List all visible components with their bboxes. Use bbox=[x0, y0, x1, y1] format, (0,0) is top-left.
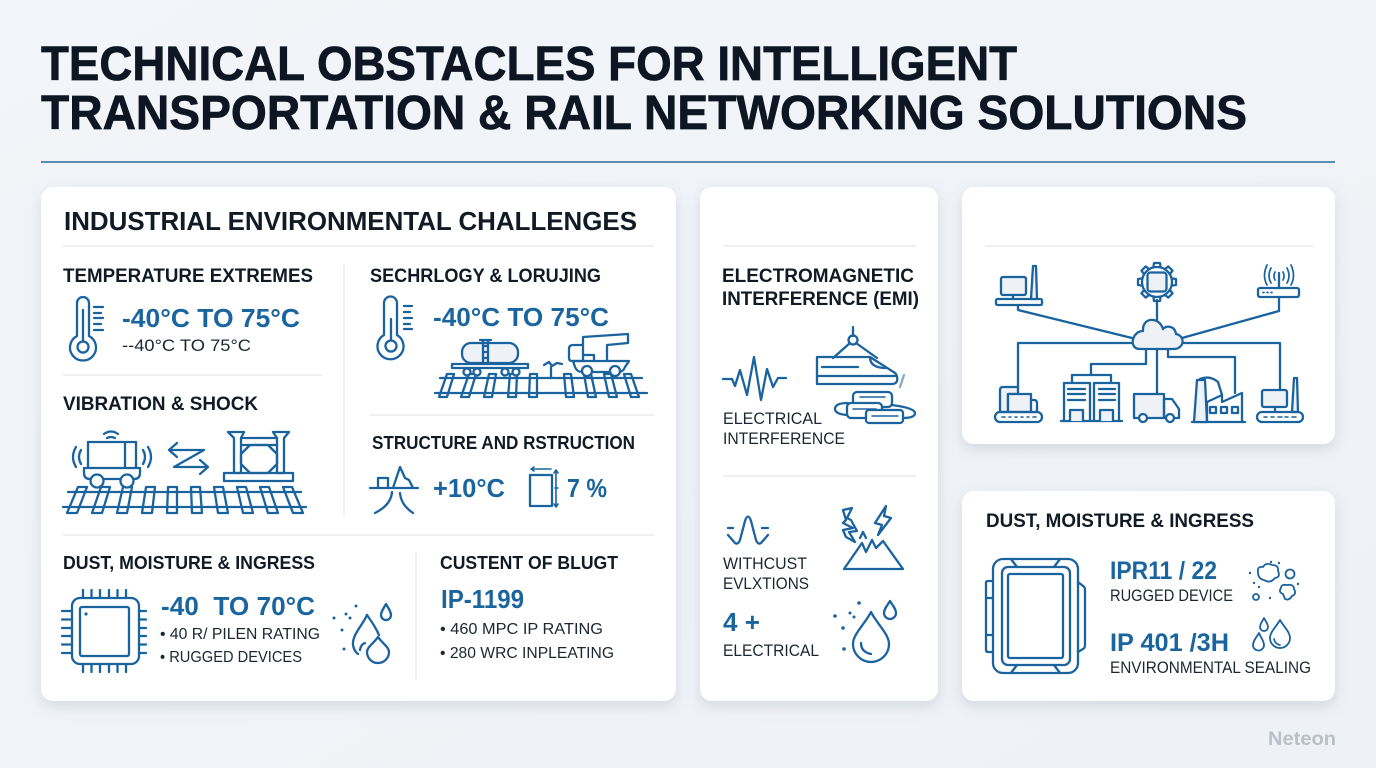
watermark: brand name: Neteon bbox=[1268, 728, 1336, 750]
section: technology and loading bbox=[370, 266, 647, 397]
heading: dust, moisture and ingress: DUST, MOISTURE & INGRESS bbox=[63, 553, 315, 573]
section: custent of blugt bbox=[440, 553, 618, 662]
value: temperature range: -40°C TO 75°C bbox=[122, 305, 300, 333]
caption: withcust evlxtions: WITHCUST bbox=[723, 555, 807, 573]
value: rating: IP 401 /3H bbox=[1110, 629, 1229, 657]
bullet list bbox=[440, 621, 614, 662]
heading: electromagnetic interference bbox=[722, 265, 919, 310]
panel: industrial environmental challenges bbox=[41, 187, 676, 701]
panel: dust, moisture and ingress ratings bbox=[962, 491, 1335, 701]
heading: custent of blugt: CUSTENT OF BLUGT bbox=[440, 553, 618, 573]
icon: factory bbox=[1192, 378, 1245, 422]
caption: rugged device: RUGGED DEVICE bbox=[1110, 587, 1233, 605]
value: temperature rise: +10°C bbox=[433, 475, 505, 503]
icon: conveyor machine bbox=[995, 387, 1042, 422]
icon: office buildings bbox=[1061, 375, 1122, 421]
value: temperature range: -40 TO 70°C bbox=[161, 593, 315, 621]
section: structure and restriction bbox=[370, 433, 635, 513]
icon: small signal wave bbox=[728, 516, 768, 544]
heading: temperature extremes: TEMPERATURE EXTREMES bbox=[63, 266, 313, 287]
icon: delivery truck bbox=[1134, 394, 1179, 422]
bullet list: • RUGGED DEVICES bbox=[160, 649, 302, 666]
icon: lightning over mountains bbox=[843, 506, 903, 569]
bullet list: • 40 R/ PILEN RATING bbox=[160, 626, 320, 643]
network connection lines bbox=[1018, 297, 1280, 394]
section: temperature extremes bbox=[63, 266, 313, 361]
bullet list bbox=[160, 626, 320, 666]
icon: bridge and peak bbox=[370, 467, 418, 513]
icon: structural frame bbox=[224, 432, 293, 481]
heading: vibration and shock: VIBRATION & SHOCK bbox=[63, 394, 258, 415]
icon: vibrating rail vehicle on track bbox=[63, 432, 306, 513]
icon: shock arrows bbox=[169, 443, 208, 474]
icon: thermometer bbox=[378, 296, 412, 359]
heading: electromagnetic interference: INTERFERENCE (EMI) bbox=[722, 288, 919, 310]
icon: rugged device enclosure bbox=[986, 559, 1085, 673]
caption: electrical: ELECTRICAL bbox=[723, 642, 819, 660]
caption: withcust evlxtions bbox=[723, 555, 809, 593]
bullet list: • 280 WRC INPLEATING bbox=[440, 645, 614, 662]
icon: gear with chip bbox=[1138, 263, 1176, 301]
value: percentage: 7 % bbox=[567, 475, 607, 503]
section: dust, moisture and ingress bbox=[62, 553, 391, 672]
icon: cloud hub bbox=[1133, 320, 1183, 349]
icon: water drops bbox=[833, 601, 896, 662]
icon: rail tanker and crane on track bbox=[435, 334, 647, 397]
icon: train and rail cars bbox=[817, 327, 915, 423]
heading: structure and restriction: STRUCTURE AND RSTRUCTION bbox=[372, 433, 635, 453]
caption: electrical interference: ELECTRICAL bbox=[723, 410, 822, 428]
value: temperature range: -40°C TO 75°C bbox=[433, 304, 609, 332]
heading: dust, moisture and ingress: DUST, MOISTURE & INGRESS bbox=[986, 511, 1254, 532]
heading: technology and loading: SECHRLOGY & LORUJING bbox=[370, 266, 601, 287]
title bbox=[41, 38, 1247, 140]
caption: electrical interference: INTERFERENCE bbox=[723, 430, 845, 448]
icon: laptop with antenna bbox=[996, 266, 1042, 305]
panel heading: INDUSTRIAL ENVIRONMENTAL CHALLENGES bbox=[64, 208, 637, 236]
panel: network diagram bbox=[962, 187, 1335, 444]
bullet list: • 460 MPC IP RATING bbox=[440, 621, 603, 638]
icon: water drops bbox=[1253, 618, 1290, 650]
panel: electromagnetic interference bbox=[700, 187, 938, 701]
icon: wireless router bbox=[1258, 265, 1299, 297]
icon: processor chip bbox=[62, 590, 146, 672]
heading: electromagnetic interference: ELECTROMAGNETIC bbox=[722, 265, 914, 287]
value: four plus: 4 + bbox=[723, 609, 760, 637]
value: ip code: IP-1199 bbox=[441, 586, 524, 614]
icon: dimension rectangle bbox=[530, 467, 558, 507]
section: vibration and shock bbox=[63, 394, 306, 513]
icon: machine with antenna bbox=[1257, 378, 1303, 422]
title: TECHNICAL OBSTACLES FOR INTELLIGENT bbox=[41, 38, 1017, 91]
caption: electrical interference bbox=[723, 410, 845, 448]
title: TRANSPORTATION & RAIL NETWORKING SOLUTIONS bbox=[41, 87, 1247, 140]
caption: withcust evlxtions: EVLXTIONS bbox=[723, 575, 809, 593]
icon: dust particles bbox=[1249, 561, 1299, 600]
caption: environmental sealing: ENVIRONMENTAL SEALING bbox=[1110, 659, 1311, 677]
icon: water drops and dust bbox=[332, 604, 391, 663]
value: rating: IPR11 / 22 bbox=[1110, 557, 1217, 585]
icon: thermometer bbox=[70, 297, 103, 361]
icon: interference waveform bbox=[723, 357, 786, 400]
caption: temperature range: --40°C TO 75°C bbox=[122, 336, 251, 355]
